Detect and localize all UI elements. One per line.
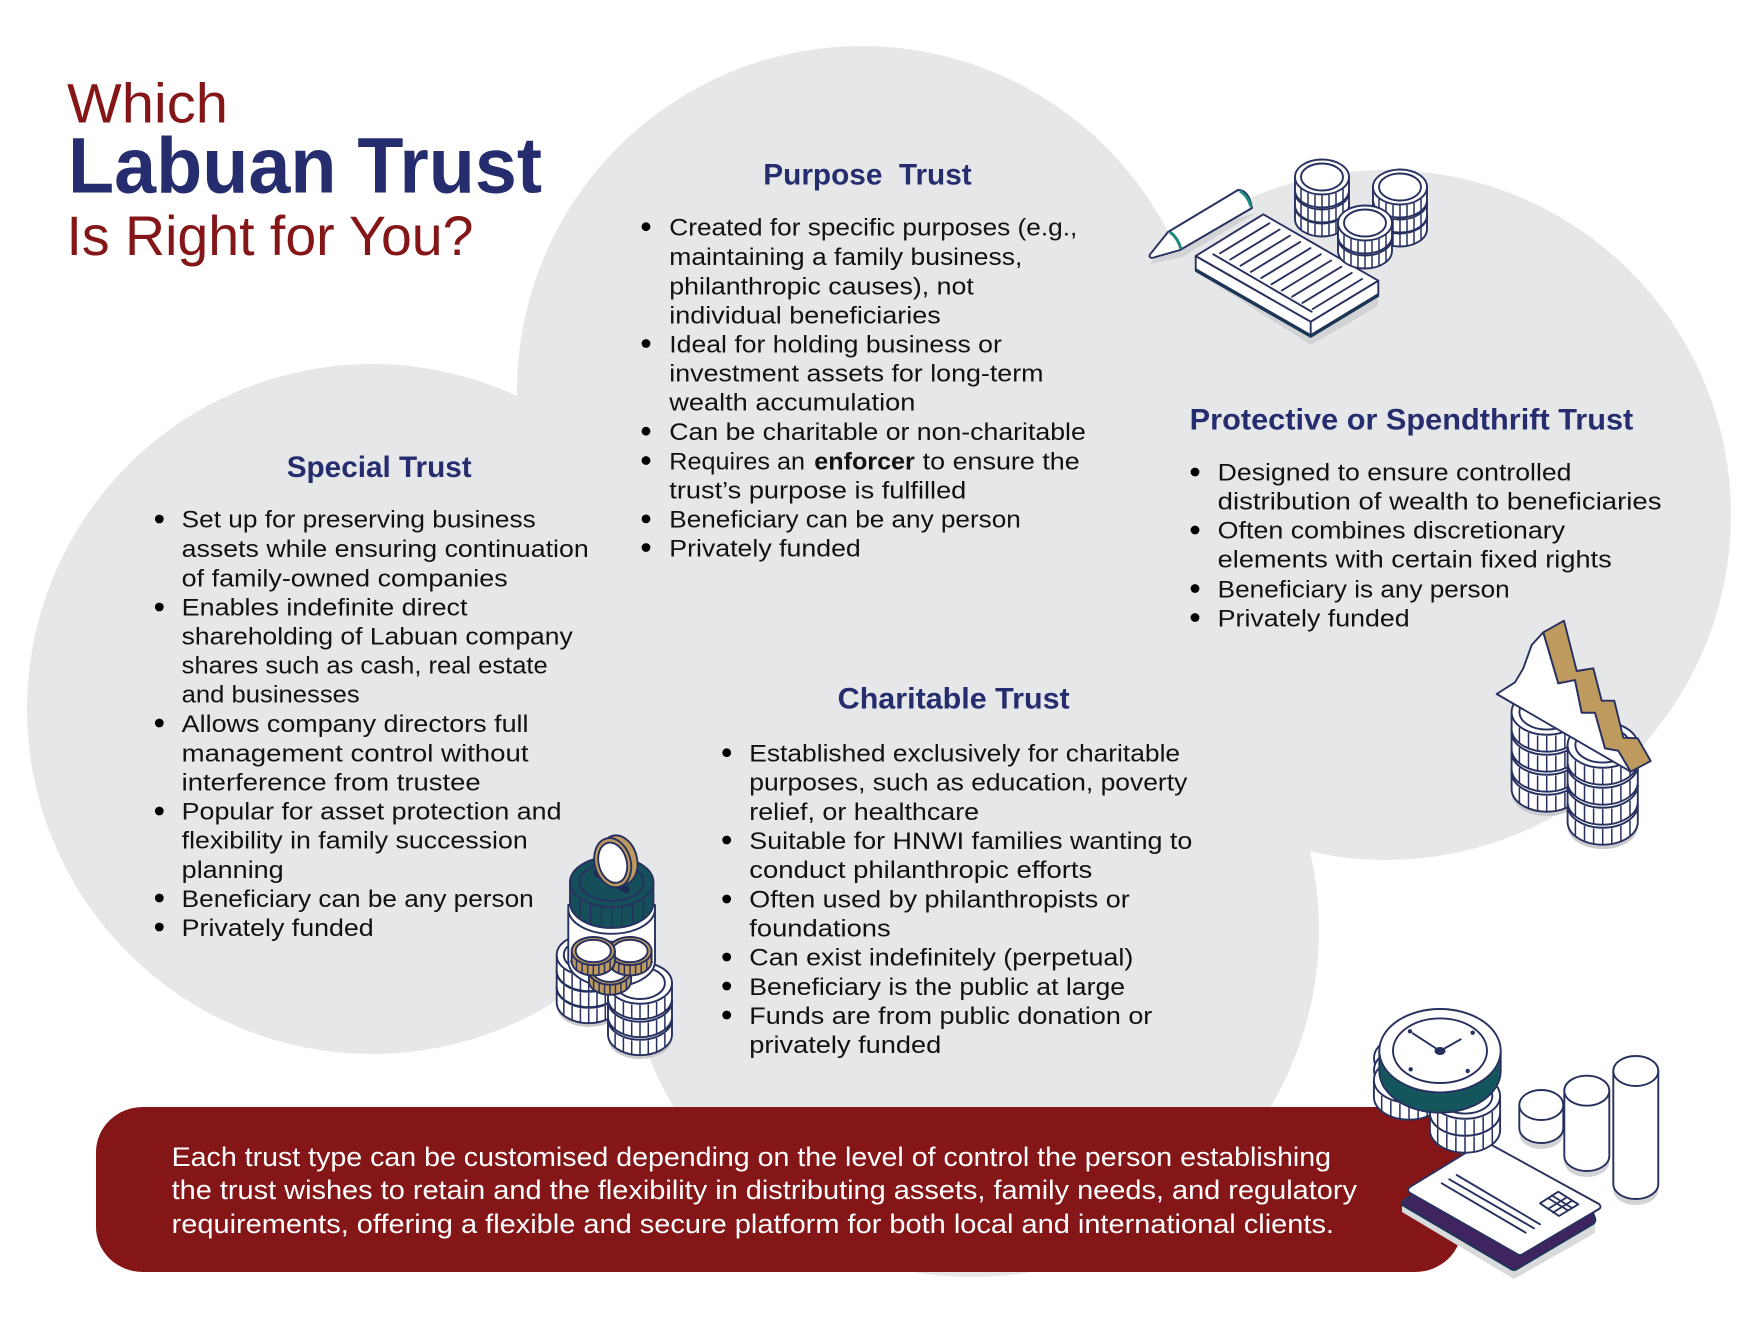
text block: Charitable Trust list: Beneficiary is the public at large <box>749 974 1125 1001</box>
heading: Charitable Trust: Charitable Trust <box>838 682 1070 715</box>
panel: Purpose Trust background circle <box>517 46 1207 736</box>
text block: Purpose Trust list: investment assets for long-term <box>669 361 1044 388</box>
text block: Charitable Trust list <box>722 741 1192 1059</box>
title: Is Right for You? <box>66 204 474 267</box>
text block: Purpose Trust list: Can be charitable or non-charitable <box>669 419 1086 446</box>
text block: Special Trust list: of family-owned companies <box>182 566 508 593</box>
text block: Protective or Spendthrift Trust list <box>1191 460 1661 632</box>
text block: Charitable Trust list: privately funded <box>749 1032 941 1059</box>
text block: Special Trust list: Beneficiary can be any person <box>182 886 534 913</box>
text block: Purpose Trust list: maintaining a family business, <box>669 244 1022 271</box>
text block: Special Trust list: and businesses <box>182 682 360 709</box>
text block: Charitable Trust list: Often used by philanthropists or <box>749 887 1130 914</box>
text block: Special Trust list: Set up for preserving business <box>182 507 536 534</box>
text block: Purpose Trust list: Privately funded <box>669 535 861 562</box>
coin stacks <box>1295 160 1427 268</box>
coins in jar <box>572 937 652 995</box>
text block: Special Trust list: management control without <box>182 740 529 767</box>
icon: pencil, document and coin stacks <box>1150 160 1427 345</box>
text block: Charitable Trust list: relief, or healthcare <box>749 799 979 826</box>
payment card <box>1402 1142 1600 1279</box>
panel: Special Trust background circle <box>27 364 717 1054</box>
callout banner: requirements, offering a flexible and secure platform for both local and international clients. <box>172 1209 1334 1239</box>
text block: Charitable Trust list: conduct philanthropic efforts <box>749 857 1092 884</box>
text block: Purpose Trust list: philanthropic causes), not <box>669 273 974 300</box>
text block: Special Trust list: interference from trustee <box>182 770 481 797</box>
title: Labuan Trust <box>68 121 542 210</box>
text block: Purpose Trust list: trust’s purpose is fulfilled <box>669 477 966 504</box>
callout banner: Each trust type can be customised depending on the level of control the person establishing <box>172 1142 1331 1172</box>
text block: Purpose Trust list: wealth accumulation <box>668 390 915 417</box>
callout banner: the trust wishes to retain and the flexibility in distributing assets, family needs, and regulatory <box>172 1175 1358 1205</box>
text block: Purpose Trust list <box>642 215 1086 562</box>
text block: Special Trust list: Popular for asset protection and <box>182 799 561 826</box>
text block: Special Trust list: Privately funded <box>182 915 374 942</box>
text block: Protective or Spendthrift Trust list: distribution of wealth to beneficiaries <box>1218 489 1661 516</box>
text block: Special Trust list: assets while ensuring continuation <box>182 536 589 563</box>
jar lid <box>570 857 653 928</box>
cylinders <box>1519 1056 1658 1205</box>
document <box>1196 214 1378 345</box>
text block: Protective or Spendthrift Trust list: Privately funded <box>1218 605 1410 632</box>
clock <box>1379 1009 1501 1113</box>
text block: Charitable Trust list: Funds are from public donation or <box>749 1003 1152 1030</box>
text block: Special Trust list: shares such as cash, real estate <box>182 653 548 680</box>
text block: Special Trust list: Allows company directors full <box>182 711 528 738</box>
text block: Purpose Trust list: enforcer <box>814 448 915 475</box>
title <box>66 72 542 267</box>
text block: Purpose Trust list: Created for specific purposes (e.g., <box>669 215 1077 242</box>
text block: Special Trust list <box>155 507 589 942</box>
coins under clock <box>1374 1035 1500 1153</box>
text block: Protective or Spendthrift Trust list: Beneficiary is any person <box>1218 576 1510 603</box>
text block: Protective or Spendthrift Trust list: Designed to ensure controlled <box>1218 460 1572 487</box>
text block: Protective or Spendthrift Trust list: elements with certain fixed rights <box>1218 547 1612 574</box>
text block: Charitable Trust list: foundations <box>749 916 891 943</box>
text block: Protective or Spendthrift Trust list: Often combines discretionary <box>1218 518 1565 545</box>
text block: Charitable Trust list: Suitable for HNWI families wanting to <box>749 828 1192 855</box>
text block: Special Trust list: shareholding of Labuan company <box>182 624 573 651</box>
icon: coin jar on coin stacks <box>557 831 672 1059</box>
pencil <box>1150 190 1256 264</box>
icon: clock, coins, cylinders and payment card <box>1374 1009 1658 1279</box>
text block: Purpose Trust list: Beneficiary can be any person <box>669 507 1021 534</box>
text block: Purpose Trust list: to ensure the <box>923 448 1080 475</box>
text block: Special Trust list: Enables indefinite direct <box>182 595 468 622</box>
panel: Protective or Spendthrift Trust background circle <box>1041 170 1731 860</box>
heading: Special Trust: Special Trust <box>287 451 472 484</box>
text block: Charitable Trust list: purposes, such as education, poverty <box>749 770 1187 797</box>
jar body <box>568 905 655 987</box>
heading: Protective or Spendthrift Trust: Protective or Spendthrift Trust <box>1190 403 1633 436</box>
icon: falling chart on coin stacks <box>1497 621 1651 849</box>
heading: Purpose Trust: Purpose Trust <box>763 158 972 191</box>
callout banner <box>96 1107 1462 1272</box>
text block: Purpose Trust list: Ideal for holding business or <box>669 331 1002 358</box>
text block: Purpose Trust list: Requires an <box>669 448 805 475</box>
title: Which <box>67 72 228 135</box>
coin dropping in jar <box>589 831 643 892</box>
panel: Charitable Trust background circle <box>625 583 1319 1277</box>
text block: Charitable Trust list: Can exist indefinitely (perpetual) <box>749 945 1133 972</box>
text block: Special Trust list: planning <box>182 857 284 884</box>
text block: Purpose Trust list: individual beneficiaries <box>669 302 941 329</box>
text block: Special Trust list: flexibility in family succession <box>182 828 528 855</box>
text block: Charitable Trust list: Established exclusively for charitable <box>749 741 1180 768</box>
